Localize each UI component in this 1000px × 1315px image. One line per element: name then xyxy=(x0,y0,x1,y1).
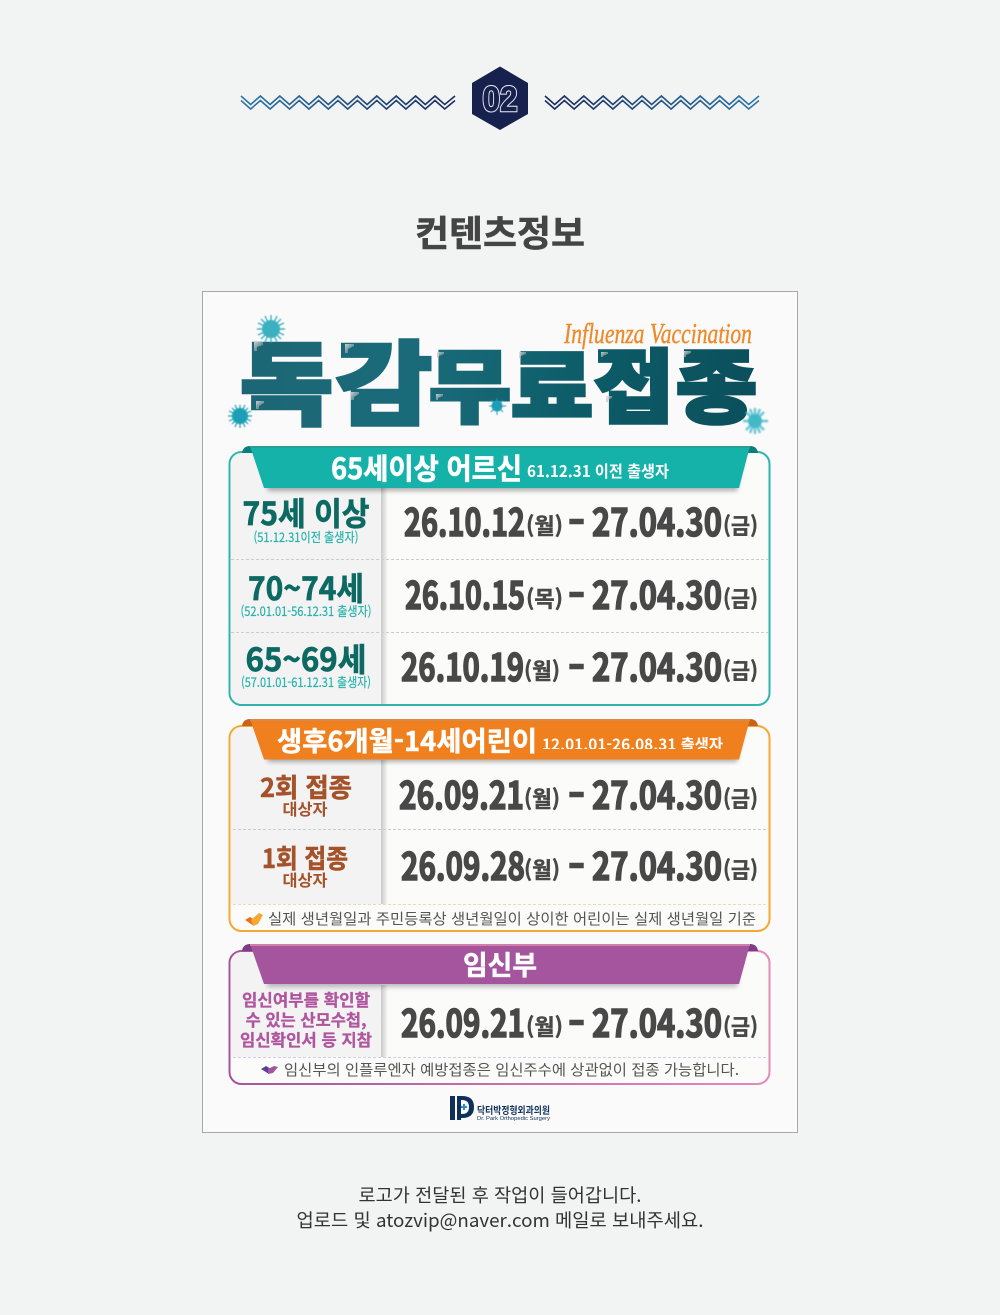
icon: virus center xyxy=(489,398,506,415)
date row: 26.09.21 xyxy=(401,993,525,1048)
date row: (금) xyxy=(723,1010,758,1042)
row: 70-74: (금) xyxy=(723,582,758,614)
row: 75+: (51.12.31이전 출생자) xyxy=(254,527,358,546)
row: two doses: 26.09.21 xyxy=(399,765,524,820)
row: 70-74 xyxy=(240,564,758,620)
clinic logo xyxy=(450,1096,551,1122)
section number header xyxy=(241,66,759,130)
row: 70-74: (52.01.01-56.12.31 출생자) xyxy=(240,601,372,620)
left label column xyxy=(231,952,381,1057)
row: one dose: 1회 접종 xyxy=(262,839,348,876)
row: 65-69: 27.04.30 xyxy=(592,637,722,692)
panel frame xyxy=(230,452,770,705)
poster xyxy=(202,292,798,1132)
poster title: 료 xyxy=(511,324,593,440)
panel: children xyxy=(230,719,770,931)
row: 65-69: (월) xyxy=(524,654,560,686)
poster sheet xyxy=(202,292,798,1132)
date row xyxy=(401,993,758,1048)
row: 70-74: 70~74세 xyxy=(248,564,364,610)
row: 70-74: 27.04.30 xyxy=(592,565,722,620)
row: two doses: 대상자 xyxy=(282,796,328,820)
row: two doses: (월) xyxy=(524,782,560,814)
footnote: 실제 생년월일과 주민등록상 생년월일이 상이한 어린이는 실제 생년월일 기준 xyxy=(268,908,756,929)
row: one dose: 26.09.28 xyxy=(401,836,525,891)
row: 75+: 26.10.12 xyxy=(404,492,525,547)
poster title: 독 xyxy=(240,312,333,444)
panel: pregnant women xyxy=(230,944,770,1084)
row: 70-74: 26.10.15 xyxy=(405,565,525,620)
poster title: 무 xyxy=(429,324,511,440)
ribbon header: 61.12.31 이전 출생자 xyxy=(527,458,669,482)
icon: virus right xyxy=(743,408,768,434)
clinic logo: Dr. Park Orthopedic Surgery xyxy=(477,1116,551,1122)
footnote: 임신부의 인플루엔자 예방접종은 임신주수에 상관없이 접종 가능합니다. xyxy=(284,1059,739,1080)
ribbon header xyxy=(242,944,758,987)
row: one dose: 대상자 xyxy=(282,867,328,891)
row: two doses: (금) xyxy=(723,782,758,814)
title glossy highlights xyxy=(254,342,691,409)
ribbon header xyxy=(242,719,758,762)
row: 65-69: - xyxy=(568,637,585,692)
eligibility text: 임신여부를 확인할 xyxy=(242,987,370,1011)
left label column xyxy=(231,453,381,704)
eligibility text xyxy=(240,987,372,1051)
ribbon header: 65세이상 어르신 xyxy=(331,446,522,488)
row: 65-69: 65~69세 xyxy=(246,635,366,681)
date row: 27.04.30 xyxy=(592,993,722,1048)
row: 75+: (금) xyxy=(723,509,758,541)
badge: hexagon 02 xyxy=(472,66,528,130)
poster title: 감 xyxy=(336,312,432,444)
eligibility text: 임신확인서 등 지참 xyxy=(240,1027,372,1051)
poster title: 종 xyxy=(676,324,757,440)
footer note xyxy=(296,1182,704,1233)
row: one dose: (월) xyxy=(524,853,560,885)
date row: - xyxy=(568,993,585,1048)
panel: seniors 65+ xyxy=(230,446,770,705)
panel frame xyxy=(230,951,770,1084)
row: 65-69: (금) xyxy=(723,654,758,686)
ribbon header: 임신부 xyxy=(463,944,537,983)
ribbon header xyxy=(242,446,758,491)
badge: hexagon 02: 02 xyxy=(482,80,518,119)
icon: virus top left xyxy=(257,315,285,343)
left label column xyxy=(231,727,381,904)
row: 75+: 27.04.30 xyxy=(592,492,722,547)
row: one dose: (금) xyxy=(723,853,758,885)
footer note: 업로드 및 atozvip@naver.com 메일로 보내주세요. xyxy=(296,1207,704,1233)
panel frame xyxy=(230,726,770,931)
row: two doses: - xyxy=(568,765,585,820)
row: 65-69: (57.01.01-61.12.31 출생자) xyxy=(241,672,371,691)
row: 65-69 xyxy=(241,635,758,692)
eligibility text: 수 있는 산모수첩, xyxy=(246,1007,366,1031)
row: 75+: (월) xyxy=(526,509,563,541)
poster title: 접 xyxy=(594,324,674,440)
heading: 컨텐츠정보 xyxy=(415,205,585,257)
row: one dose xyxy=(262,836,758,891)
row: 75+: - xyxy=(568,492,585,547)
right zigzag divider xyxy=(545,96,759,109)
row: 70-74: (목) xyxy=(526,582,563,614)
row: one dose: 27.04.30 xyxy=(592,836,722,891)
row: one dose: - xyxy=(568,836,585,891)
left zigzag divider xyxy=(241,96,455,109)
ribbon header: 생후6개월-14세어린이 xyxy=(277,720,537,759)
ribbon header: 12.01.01-26.08.31 출생자 xyxy=(542,733,723,755)
row: 75+: 75세 이상 xyxy=(242,489,370,535)
icon: purple check xyxy=(261,1066,278,1074)
clinic logo: 닥터박정형외과의원 xyxy=(477,1102,550,1117)
script subtitle: Influenza Vaccination xyxy=(563,318,752,350)
poster title xyxy=(240,312,757,444)
row: two doses xyxy=(260,765,758,820)
row: 65-69: 26.10.19 xyxy=(401,637,524,692)
footer note: 로고가 전달된 후 작업이 들어갑니다. xyxy=(358,1182,642,1208)
badge: hexagon 02: 02 xyxy=(482,80,518,119)
icon: orange check xyxy=(245,913,263,926)
row: 75+ xyxy=(242,489,758,547)
row: two doses: 2회 접종 xyxy=(260,768,352,805)
row: 70-74: - xyxy=(568,565,585,620)
icon: virus lower left xyxy=(228,405,252,428)
date row: (월) xyxy=(526,1010,563,1042)
row: two doses: 27.04.30 xyxy=(592,765,722,820)
